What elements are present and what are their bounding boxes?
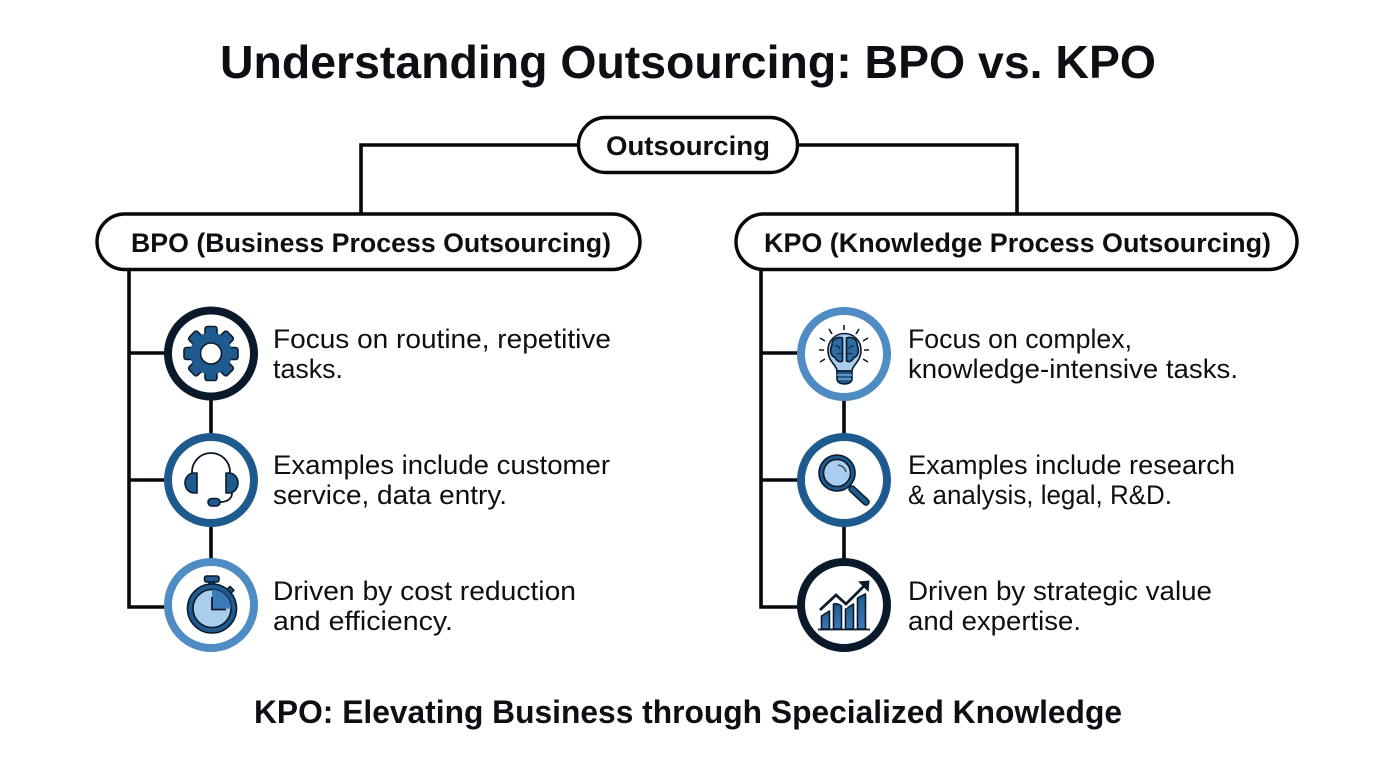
title: Understanding Outsourcing: BPO vs. KPO	[220, 36, 1156, 88]
footer tagline: KPO: Elevating Business through Specialized Knowledge	[254, 694, 1122, 730]
text: customer service examples: service, data entry.	[273, 480, 507, 510]
BPO heading: BPO (Business Process Outsourcing)	[131, 228, 611, 258]
panel: BPO	[97, 214, 640, 648]
text: cost reduction	[273, 576, 576, 636]
icon: growth chart	[801, 562, 887, 648]
panel: KPO	[736, 214, 1297, 648]
text: knowledge tasks: Focus on complex,	[908, 324, 1132, 354]
text: strategic value: and expertise.	[908, 606, 1081, 636]
KPO heading	[736, 214, 1297, 270]
icon: headset	[168, 437, 254, 523]
text: routine tasks: Focus on routine, repetitive	[273, 324, 611, 354]
text: strategic value: Driven by strategic value	[908, 576, 1212, 606]
root node: Outsourcing	[578, 118, 798, 172]
text: research examples: Examples include research	[908, 450, 1235, 480]
icon: stopwatch	[168, 562, 254, 648]
text: routine tasks	[273, 324, 611, 384]
KPO tree lines	[761, 270, 844, 607]
root node: Outsourcing: Outsourcing	[606, 131, 770, 161]
text: cost reduction: Driven by cost reduction	[273, 576, 576, 606]
text: cost reduction: and efficiency.	[273, 606, 453, 636]
BPO heading	[97, 214, 640, 270]
text: research examples: & analysis, legal, R&D.	[908, 480, 1172, 510]
BPO tree lines	[129, 270, 211, 607]
icon: gear	[168, 310, 254, 396]
icon: light bulb with brain	[801, 311, 887, 397]
connector: outsourcing to BPO and KPO	[361, 145, 1017, 214]
text: customer service examples: Examples include customer	[273, 450, 610, 480]
text: research examples	[908, 450, 1235, 510]
text: knowledge tasks: knowledge-intensive tasks.	[908, 354, 1238, 384]
text: customer service examples	[273, 450, 610, 510]
KPO heading: KPO (Knowledge Process Outsourcing)	[764, 228, 1271, 258]
text: routine tasks: tasks.	[273, 354, 343, 384]
icon: magnifying glass	[801, 437, 887, 523]
text: strategic value	[908, 576, 1212, 636]
text: knowledge tasks	[908, 324, 1238, 384]
